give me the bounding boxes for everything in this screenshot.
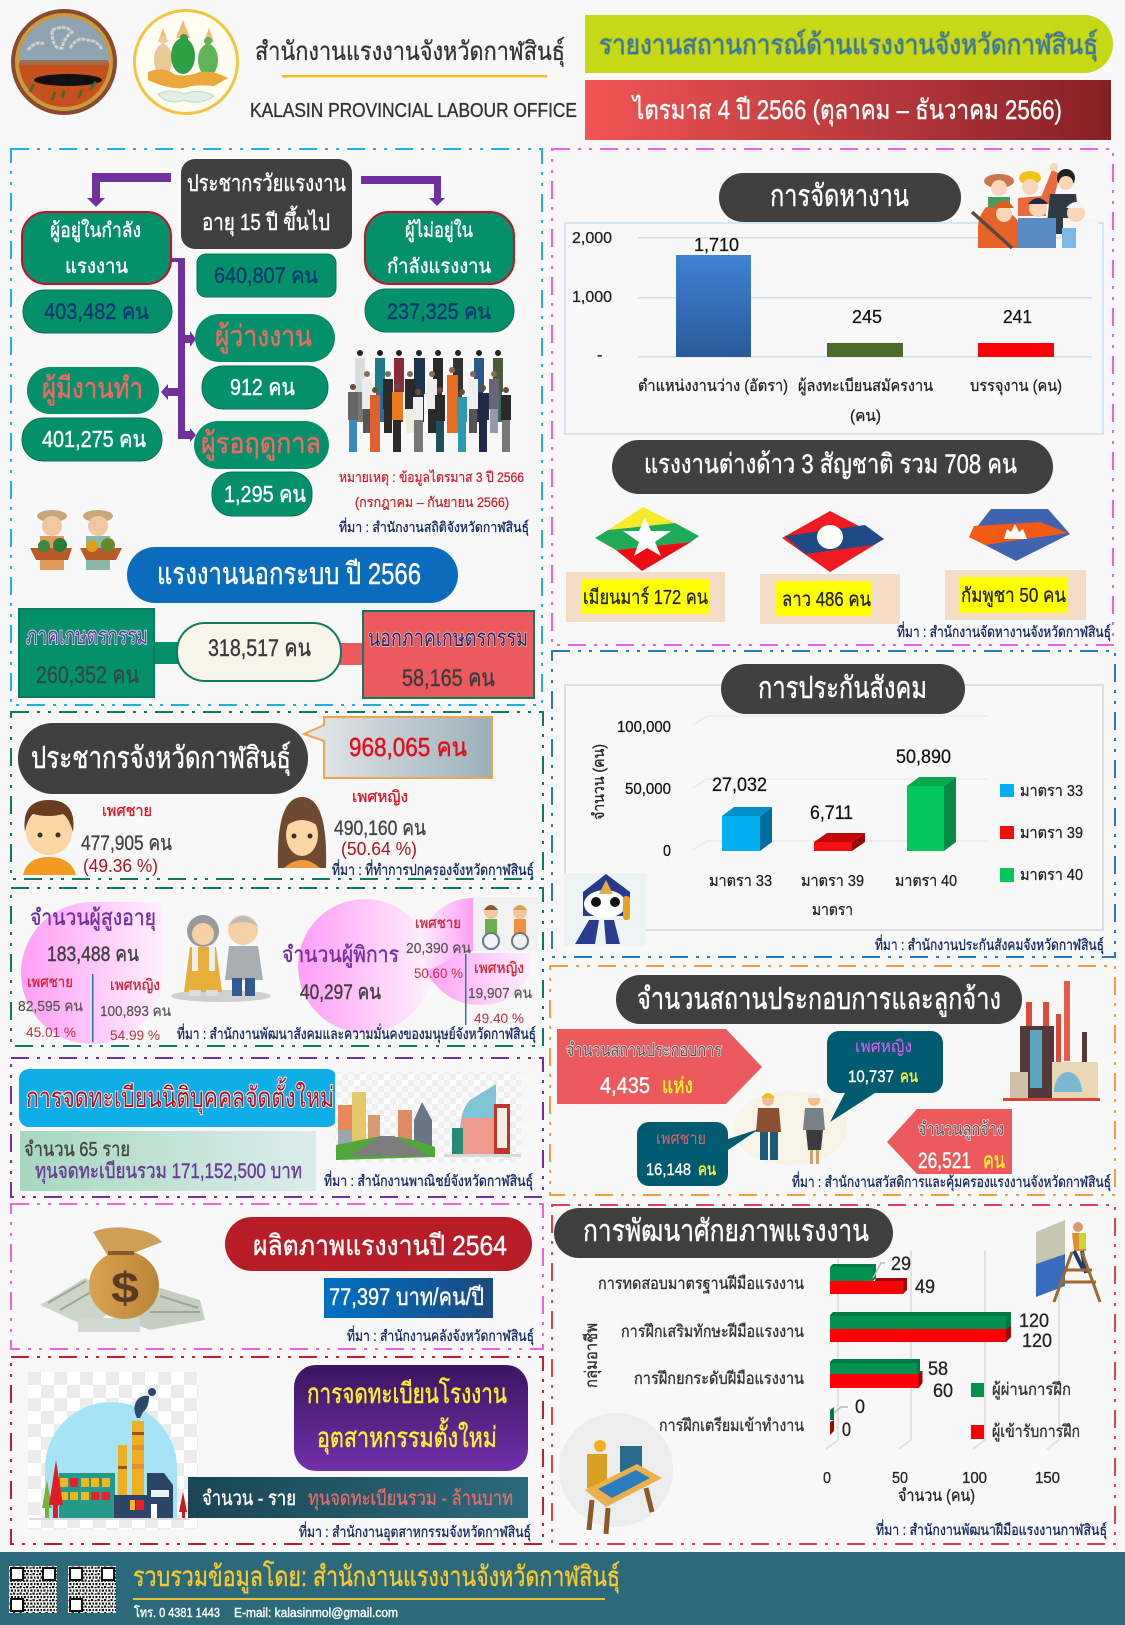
icon: occupations group xyxy=(972,163,1098,248)
elderly statistics: จำนวนผู้สูงอายุ xyxy=(30,905,156,931)
employed: ผู้มีงานทำ xyxy=(42,373,143,406)
non-agriculture box xyxy=(363,611,534,698)
panel: new factories xyxy=(11,1357,543,1544)
panel: establishments and employees xyxy=(550,966,1115,1195)
bars: level up xyxy=(830,1359,953,1402)
male population: 477,905 คน xyxy=(81,832,172,855)
icon: factory xyxy=(28,1372,198,1530)
callout: female employees: คน xyxy=(900,1067,918,1086)
agriculture box: ภาคเกษตรกรรม xyxy=(26,623,148,650)
establishments arrow: 4,435 xyxy=(600,1073,650,1098)
label: Laos xyxy=(760,574,900,624)
label: Myanmar: เมียนมาร์ 172 คน xyxy=(583,586,708,609)
chart: social security: 0 xyxy=(663,843,671,860)
connector bands xyxy=(152,642,365,665)
factories heading xyxy=(294,1365,528,1471)
bar: section 40: 50,890 xyxy=(896,747,951,768)
juristic values: จำนวน 65 ราย xyxy=(24,1139,130,1161)
productivity heading: ผลิตภาพแรงงานปี 2564 xyxy=(253,1230,507,1261)
chart: job placement xyxy=(565,223,1103,434)
disabled statistics: 19,907 คน xyxy=(468,985,532,1002)
bars: skill standard test: 49 xyxy=(915,1277,935,1298)
chart: training: การฝึกเสริมทักษะฝีมือแรงงาน xyxy=(621,1322,804,1341)
value: 403,482: 403,482 คน xyxy=(44,299,149,324)
icon: group of workers xyxy=(348,350,511,452)
factories values: จำนวน - ราย xyxy=(202,1488,296,1510)
disabled statistics: 50.60 % xyxy=(414,965,463,981)
elderly statistics: 54.99 % xyxy=(110,1027,160,1043)
flag: Laos xyxy=(782,511,884,572)
icon: wall painter xyxy=(1036,1220,1100,1302)
employed: 401,275 คน xyxy=(42,426,146,452)
elderly pink shape xyxy=(21,902,163,1044)
office name English: KALASIN PROVINCIAL LABOUR OFFICE xyxy=(250,100,577,122)
icon: engineers with blueprint xyxy=(559,1413,673,1534)
chart: job placement: ผู้ลงทะเบียนสมัครงาน xyxy=(798,377,933,396)
chart: social security: มาตรา 39 xyxy=(801,873,864,890)
chart: job placement: บรรจุงาน (คน) xyxy=(970,378,1062,396)
establishments arrow: จำนวนสถานประกอบการ xyxy=(566,1040,722,1060)
legend: ผู้เข้ารับการฝึก xyxy=(992,1422,1080,1442)
in labour force box xyxy=(22,212,171,284)
working-age population box: ประชากรวัยแรงงาน xyxy=(187,170,346,196)
icon: labour office emblem xyxy=(133,9,239,115)
elderly statistics: เพศหญิง xyxy=(110,977,160,994)
icon: wheelchair users xyxy=(473,897,539,951)
in labour force box: แรงงาน xyxy=(65,256,128,278)
bar: section 33 xyxy=(712,775,772,851)
population heading: ประชากรจังหวัดกาฬสินธุ์ xyxy=(31,741,291,777)
chart: social security: มาตรา 40 xyxy=(895,873,957,890)
employees arrow: คน xyxy=(983,1148,1005,1173)
flag: Myanmar xyxy=(595,507,699,571)
disabled statistics: 49.40 % xyxy=(474,1010,524,1026)
footer xyxy=(0,1552,1125,1625)
outside labour force box: ผู้ไม่อยู่ใน xyxy=(405,219,473,243)
contact details: โทร. 0 4381 1443 xyxy=(134,1605,220,1620)
informal workers total xyxy=(177,623,341,681)
outside labour force box: กำลังแรงงาน xyxy=(387,256,491,278)
agriculture box: 260,352 คน xyxy=(36,662,139,689)
legend: มาตรา 40 xyxy=(1020,867,1083,884)
chart: training: 0 xyxy=(823,1470,831,1487)
source: ที่มา : สำนักงานพัฒนาสังคมและความมั่นคงของมนุษย์จังหวัดกาฬสินธุ์ xyxy=(177,1023,536,1044)
job placement heading: การจัดหางาน xyxy=(770,180,909,213)
value: 640,807: 640,807 คน xyxy=(214,263,318,288)
seasonal workers: ผู้รอฤดูกาล xyxy=(201,428,321,461)
elderly statistics: 100,893 คน xyxy=(100,1003,171,1020)
female population: 490,160 คน xyxy=(334,817,426,840)
elderly statistics: เพศชาย xyxy=(27,974,73,991)
foreign workers heading xyxy=(612,440,1053,494)
bars: pre-employment xyxy=(830,1397,865,1441)
unemployed xyxy=(195,314,335,409)
chart: training: จำนวน (คน) xyxy=(898,1486,975,1505)
panel: provincial population xyxy=(11,712,543,880)
working-age population box: อายุ 15 ปี ขึ้นไป xyxy=(202,206,330,236)
working-age population box xyxy=(181,159,352,249)
factories heading: การจดทะเบียนโรงงาน xyxy=(307,1377,507,1409)
note and source: ที่มา : สำนักงานสถิติจังหวัดกาฬสินธุ์ xyxy=(339,518,529,536)
value: 237,325 xyxy=(365,289,514,332)
unemployed: ผู้ว่างงาน xyxy=(215,321,312,354)
arrows: population split xyxy=(87,173,445,442)
juristic heading xyxy=(19,1069,337,1127)
office name Thai: สำนักงานแรงงานจังหวัดกาฬสินธุ์ xyxy=(255,36,565,67)
callout: female employees: เพศหญิง xyxy=(855,1037,912,1056)
chart: social security: มาตรา xyxy=(812,902,853,919)
employees arrow xyxy=(887,1109,1012,1174)
report title banner xyxy=(585,15,1113,73)
bars: level up: 60 xyxy=(933,1381,953,1402)
establishments heading: จำนวนสถานประกอบการและลูกจ้าง xyxy=(637,983,1001,1017)
chart: social security: มาตรา 33 xyxy=(709,873,772,890)
outside labour force box xyxy=(365,212,514,284)
note and source xyxy=(339,469,529,536)
in labour force box: ผู้อยู่ในกำลัง xyxy=(50,219,141,243)
male population: เพศชาย xyxy=(102,803,152,820)
job placement heading xyxy=(719,173,961,222)
elderly statistics: 82,595 คน xyxy=(18,998,83,1015)
bars: skill standard test: 29 xyxy=(891,1254,911,1275)
informal workers heading xyxy=(127,547,458,603)
disabled statistics: เพศชาย xyxy=(415,915,461,932)
elderly statistics: 183,488 คน xyxy=(47,943,139,966)
bars: level up: 58 xyxy=(928,1359,948,1380)
quarter banner xyxy=(585,80,1111,140)
bar: registered: 245 xyxy=(852,307,882,327)
male population: (49.36 %) xyxy=(83,856,158,876)
callout: female employees: 10,737 xyxy=(848,1067,894,1086)
chart: job placement: ตำแหน่งงานว่าง (อัตรา) xyxy=(638,378,788,395)
callout: male employees: คน xyxy=(698,1160,716,1179)
chart: training xyxy=(582,1251,1080,1505)
callout: male employees xyxy=(637,1122,759,1186)
population heading xyxy=(18,723,308,794)
panel: skill development xyxy=(552,1205,1115,1544)
chart: social security xyxy=(565,685,1103,930)
chart: training: การทดสอบมาตรฐานฝีมือแรงงาน xyxy=(598,1274,804,1294)
informal workers heading: แรงงานนอกระบบ ปี 2566 xyxy=(157,558,421,591)
icon: boy xyxy=(23,800,76,875)
panel: labour productivity xyxy=(11,1204,543,1349)
callout: male employees: เพศชาย xyxy=(656,1129,706,1148)
icon: mascot xyxy=(564,873,646,946)
chart: job placement: 1,000 xyxy=(572,289,612,306)
icon: power plant xyxy=(1003,981,1100,1101)
bar: placed: 241 xyxy=(1003,307,1032,327)
unemployed: 912 คน xyxy=(230,374,295,400)
label: Cambodia: กัมพูชา 50 คน xyxy=(961,585,1066,608)
factories heading: อุตสาหกรรมตั้งใหม่ xyxy=(317,1417,497,1455)
icon: money bag: $ xyxy=(111,1264,139,1313)
productivity heading xyxy=(225,1217,532,1271)
panel: elderly and disabled xyxy=(11,888,543,1046)
factories values: ทุนจดทะเบียนรวม - ล้านบาท xyxy=(308,1488,513,1511)
QR code 1 xyxy=(9,1566,57,1613)
seasonal workers: 1,295 คน xyxy=(224,481,306,507)
panel: new juristic persons xyxy=(11,1058,543,1197)
chart: training: การฝึกยกระดับฝีมือแรงงาน xyxy=(634,1369,804,1388)
value: 237,325: 237,325 คน xyxy=(387,299,491,324)
note and source: (กรกฎาคม – กันยายน 2566) xyxy=(355,494,509,510)
panel: job placement and foreign workers xyxy=(552,149,1113,645)
icon: office building xyxy=(444,1084,521,1157)
label: Laos: ลาว 486 คน xyxy=(782,589,871,611)
chart: social security: 100,000 xyxy=(617,719,671,736)
juristic heading: การจดทะเบียนนิติบุคคลจัดตั้งใหม่ xyxy=(26,1077,334,1115)
bar: section 33: 27,032 xyxy=(712,775,767,796)
bar: section 39: 6,711 xyxy=(810,803,853,824)
bars: skill standard test xyxy=(830,1254,935,1298)
seasonal workers xyxy=(194,421,329,516)
legend xyxy=(1000,783,1083,884)
bars: pre-employment: 0 xyxy=(842,1420,851,1441)
bar: section 40 xyxy=(896,747,956,851)
juristic values: ทุนจดทะเบียนรวม 171,152,500 บาท xyxy=(35,1160,302,1184)
label: Myanmar xyxy=(566,572,725,622)
icon: Kalasin provincial seal xyxy=(11,9,117,115)
source: ที่มา : สำนักงานพาณิชย์จังหวัดกาฬสินธุ์ xyxy=(324,1170,533,1191)
legend xyxy=(971,1380,1080,1442)
female population xyxy=(334,789,426,859)
disabled statistics xyxy=(282,915,532,1026)
source: ที่มา : สำนักงานคลังจังหวัดกาฬสินธุ์ xyxy=(347,1325,534,1346)
female population: (50.64 %) xyxy=(341,839,417,859)
bars: skill upgrade: 120 xyxy=(1019,1311,1049,1332)
female population: เพศหญิง xyxy=(352,789,408,806)
establishments heading xyxy=(616,975,1022,1024)
social security heading xyxy=(721,664,965,714)
chart: social security: 50,000 xyxy=(625,781,671,798)
header xyxy=(11,9,1113,140)
footer credit: รวบรวมข้อมูลโดย: สำนักงานแรงงานจังหวัดกาฬสินธุ์ xyxy=(133,1560,620,1594)
note and source: หมายเหตุ : ข้อมูลไตรมาส 3 ปี 2566 xyxy=(339,469,524,486)
chart: training: 150 xyxy=(1035,1470,1060,1487)
bars: skill upgrade xyxy=(830,1311,1052,1352)
icon: money bag xyxy=(40,1227,205,1332)
disabled statistics: 20,390 คน xyxy=(406,940,471,957)
chart: job placement: 2,000 xyxy=(572,230,612,247)
flag: Cambodia xyxy=(969,509,1070,561)
bars: pre-employment: 0 xyxy=(855,1397,865,1418)
productivity value xyxy=(324,1278,493,1318)
callout: female employees xyxy=(827,1031,943,1122)
disabled statistics: เพศหญิง xyxy=(474,960,524,977)
panel: working-age population xyxy=(11,149,542,705)
non-agriculture box: นอกภาคเกษตรกรรม xyxy=(368,625,528,652)
establishments arrow xyxy=(557,1029,762,1104)
chart: social security: จำนวน (คน) xyxy=(591,744,608,820)
bar: section 39 xyxy=(810,803,865,851)
bar: placed xyxy=(978,307,1054,357)
source: ที่มา : สำนักงานอุตสาหกรรมจังหวัดกาฬสินธุ์ xyxy=(299,1521,531,1542)
chart: training: การฝึกเตรียมเข้าทำงาน xyxy=(659,1416,804,1435)
chart: training: 50 xyxy=(892,1470,908,1487)
productivity value: 77,397 บาท/คน/ปี xyxy=(329,1284,484,1311)
elderly statistics: 45.01 % xyxy=(26,1024,76,1040)
social security heading: การประกันสังคม xyxy=(758,672,927,705)
skill development heading: การพัฒนาศักยภาพแรงงาน xyxy=(583,1215,869,1248)
legend: มาตรา 39 xyxy=(1020,825,1083,842)
label: Cambodia xyxy=(945,570,1086,620)
skill development heading xyxy=(554,1208,893,1258)
disabled pink shape xyxy=(298,898,532,1033)
icon: elderly couple xyxy=(171,915,271,1002)
non-agriculture box: 58,165 คน xyxy=(402,665,495,692)
agriculture box xyxy=(19,609,154,697)
contact details: E-mail: kalasinmol@gmail.com xyxy=(234,1605,398,1620)
icon: workers xyxy=(733,1091,847,1165)
male population xyxy=(81,803,172,876)
panel: social security xyxy=(552,651,1115,957)
bar: vacancies xyxy=(676,235,751,357)
callout: male employees: 16,148 xyxy=(646,1160,691,1179)
value: 640,807 xyxy=(197,254,336,297)
chart: job placement: (คน) xyxy=(850,408,881,425)
population callout xyxy=(304,717,492,778)
disabled statistics: 40,297 คน xyxy=(300,981,381,1004)
chart: training: 100 xyxy=(962,1470,987,1487)
icon: city street xyxy=(335,1072,521,1162)
juristic values xyxy=(20,1131,316,1191)
chart: job placement: - xyxy=(597,347,602,364)
disabled statistics: จำนวนผู้พิการ xyxy=(282,942,399,968)
icon: farmers with vegetables xyxy=(30,510,122,570)
employees arrow: 26,521 xyxy=(918,1148,971,1173)
bar: registered xyxy=(827,307,903,357)
value: 403,482 xyxy=(23,290,172,333)
icon: girl xyxy=(278,797,326,868)
factories values xyxy=(188,1477,528,1518)
informal workers total: 318,517 คน xyxy=(208,635,311,662)
legend: ผู้ผ่านการฝึก xyxy=(992,1380,1071,1400)
legend: มาตรา 33 xyxy=(1020,783,1083,800)
foreign workers heading: แรงงานต่างด้าว 3 สัญชาติ รวม 708 คน xyxy=(644,449,1017,479)
establishments arrow: แห่ง xyxy=(662,1073,693,1098)
contact details xyxy=(134,1605,398,1620)
employees arrow: จำนวนลูกจ้าง xyxy=(918,1119,1004,1140)
elderly statistics xyxy=(18,905,171,1043)
bars: skill upgrade: 120 xyxy=(1022,1331,1052,1352)
bar: vacancies: 1,710 xyxy=(694,235,739,255)
source: ที่มา : ที่ทำการปกครองจังหวัดกาฬสินธุ์ xyxy=(332,859,534,880)
QR code 2 xyxy=(68,1566,116,1613)
population callout: 968,065 คน xyxy=(349,732,467,762)
chart: training: กลุ่มอาชีพ xyxy=(582,1323,602,1388)
employed xyxy=(22,367,162,461)
